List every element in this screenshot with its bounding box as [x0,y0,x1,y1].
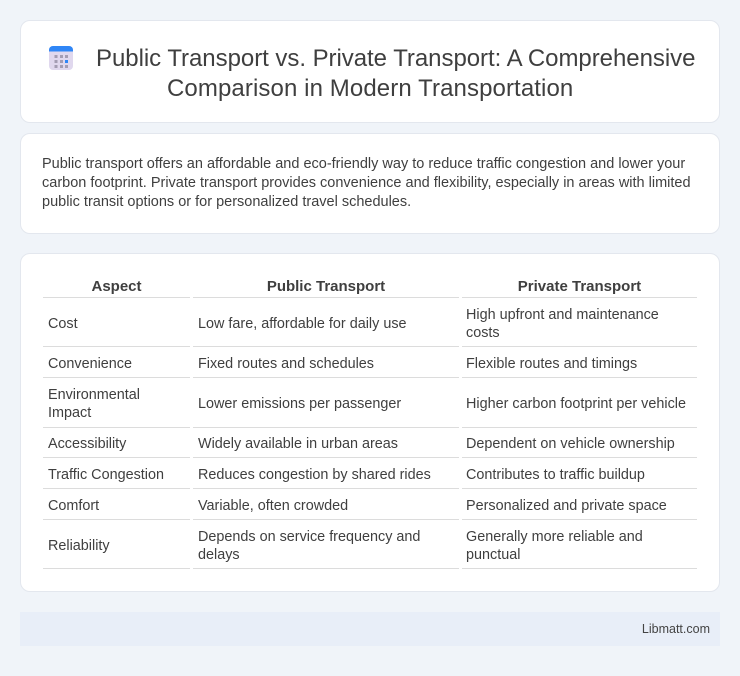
icon: calendar [49,46,73,70]
comparison table: Generally more reliable and [466,529,643,545]
table header: public transport: Public Transport [267,278,385,295]
footer bar [20,612,720,646]
row: environmental impact: Environmental [48,387,140,403]
table card [20,253,720,592]
comparison table: Personalized and private space [466,498,667,514]
comparison table: Variable, often crowded [198,498,348,514]
comparison table: Lower emissions per passenger [198,396,401,412]
title [96,45,695,102]
comparison table: delays [198,547,240,563]
row: cost: Cost [48,316,78,332]
row: environmental impact [48,387,140,421]
row: convenience: Convenience [48,356,132,372]
comparison table: Widely available in urban areas [198,436,398,452]
header card [20,20,720,123]
row: reliability: Reliability [48,538,110,554]
row: comfort: Comfort [48,498,99,514]
intro text: carbon footprint. Private transport provides convenience and flexibility, especially in areas with limited [42,175,691,191]
intro text: public transit options or for personalized travel schedules. [42,194,411,210]
title: Public Transport vs. Private Transport: A Comprehensive [96,45,695,72]
comparison table: Fixed routes and schedules [198,356,374,372]
comparison table: Flexible routes and timings [466,356,637,372]
comparison table: Reduces congestion by shared rides [198,467,431,483]
row: accessibility: Accessibility [48,436,126,452]
comparison table: Depends on service frequency and [198,529,420,545]
comparison table: punctual [466,547,520,563]
comparison table: Higher carbon footprint per vehicle [466,396,686,412]
comparison table: Contributes to traffic buildup [466,467,645,483]
table header: private transport: Private Transport [518,278,641,295]
comparison table: costs [466,325,500,341]
footer text: Libmatt.com [642,622,710,636]
row: traffic congestion: Traffic Congestion [48,467,164,483]
comparison table: Dependent on vehicle ownership [466,436,675,452]
intro text [42,156,691,210]
title: Comparison in Modern Transportation [167,75,573,102]
table header: aspect: Aspect [91,278,142,295]
comparison table: High upfront and maintenance [466,307,659,323]
row: environmental impact: Impact [48,405,91,421]
intro card [20,133,720,234]
intro text: Public transport offers an affordable and eco-friendly way to reduce traffic congestion and lower your [42,156,685,172]
comparison table: Low fare, affordable for daily use [198,316,407,332]
